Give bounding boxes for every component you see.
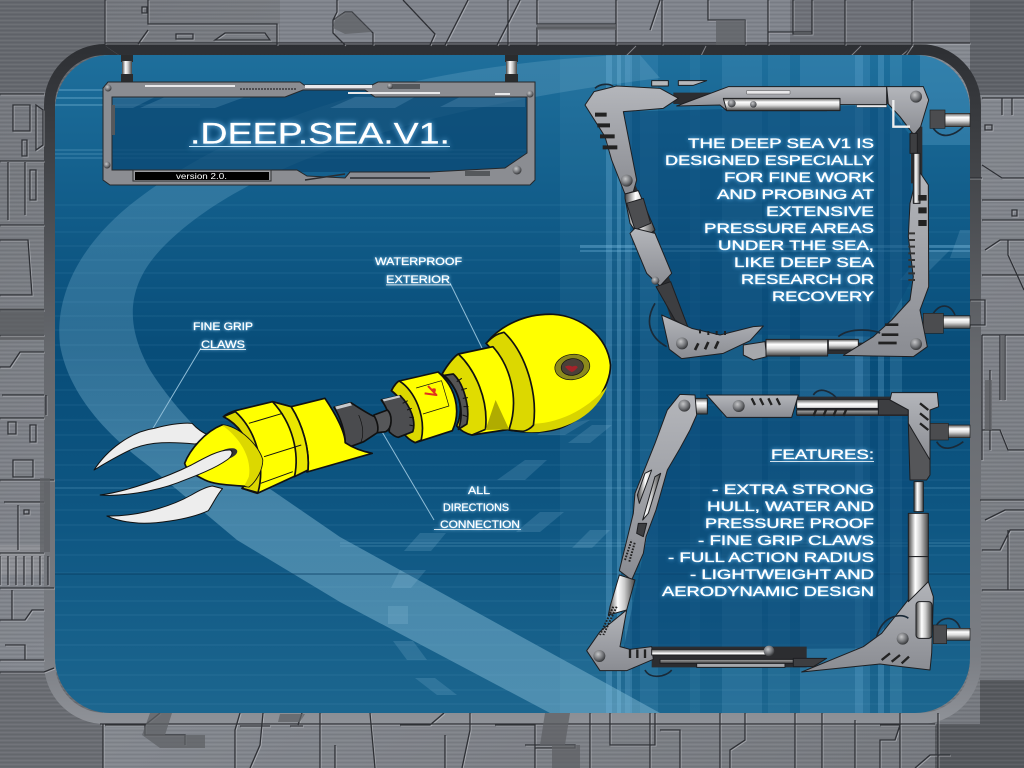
description text <box>665 136 874 304</box>
description text: UNDER THE SEA, <box>718 238 874 253</box>
head sphere <box>486 314 611 432</box>
hanging pipes <box>121 55 518 82</box>
collar <box>486 332 534 431</box>
claw top <box>94 423 209 470</box>
label: all directions connection: DIRECTIONS <box>443 502 509 514</box>
version slot <box>133 170 271 181</box>
description text: RECOVERY <box>772 289 874 304</box>
frame pieces <box>585 81 929 360</box>
description text: PRESSURE AREAS <box>704 221 874 236</box>
dark gear joint <box>381 396 414 437</box>
features text: - EXTRA STRONG <box>712 482 874 497</box>
frame pieces <box>587 393 939 672</box>
swoosh band <box>59 55 660 713</box>
description text: FOR FINE WORK <box>724 170 874 185</box>
description text: AND PROBING AT <box>717 187 874 202</box>
gear ring <box>444 374 468 429</box>
horizontal light streaks <box>55 90 970 704</box>
label: waterproof exterior: EXTERIOR <box>386 274 450 286</box>
features text: FEATURES: <box>771 447 874 462</box>
features text: - FINE GRIP CLAWS <box>698 533 874 548</box>
frame shell <box>103 82 535 185</box>
features text: - FULL ACTION RADIUS <box>668 550 874 565</box>
description text: LIKE DEEP SEA <box>734 255 874 270</box>
description text: RESEARCH OR <box>741 272 874 287</box>
bolts and details <box>593 390 963 676</box>
label: all directions connection: CONNECTION <box>440 519 520 531</box>
features text: - LIGHTWEIGHT AND <box>690 567 874 582</box>
connectors <box>930 423 970 644</box>
features text: HULL, WATER AND <box>707 499 874 514</box>
label: all directions connection: ALL <box>468 485 490 497</box>
description text: DESIGNED ESPECIALLY <box>665 153 874 168</box>
panel: ocean background <box>55 55 970 713</box>
label: fine grip claws: CLAWS <box>201 339 245 351</box>
label: fine grip claws: FINE GRIP <box>193 321 253 333</box>
dark underlay linking pieces <box>652 397 910 667</box>
description text: THE DEEP SEA V1 IS <box>688 136 874 151</box>
nose <box>185 425 262 487</box>
panel: title frame <box>103 82 535 185</box>
title: .DEEP.SEA.V1. <box>190 118 450 150</box>
panel: description frame <box>585 81 970 360</box>
label: waterproof exterior <box>375 256 462 286</box>
segment 2 <box>442 347 513 435</box>
label: fine grip claws <box>193 321 253 351</box>
claw bottom <box>107 486 222 523</box>
leader lines <box>152 283 482 520</box>
vertical light stripes <box>560 55 970 713</box>
description text: EXTENSIVE <box>766 204 874 219</box>
version slot: version 2.0. <box>176 171 227 181</box>
panel: features frame <box>587 390 970 676</box>
features text: AERODYNAMIC DESIGN <box>662 584 874 599</box>
features text <box>662 447 874 599</box>
tail body <box>291 398 372 472</box>
faint parallelograms <box>388 230 970 695</box>
label: waterproof exterior: WATERPROOF <box>375 256 462 268</box>
illustration: yellow probe <box>94 314 611 523</box>
ball joint <box>374 410 391 433</box>
dark underlay linking pieces <box>630 98 917 348</box>
dark cone <box>334 403 378 447</box>
segment 3 <box>391 372 457 443</box>
panel border ring <box>50 50 976 719</box>
features text: PRESSURE PROOF <box>705 516 874 531</box>
segment 1 <box>224 402 308 493</box>
connectors <box>923 110 970 333</box>
bolts and details <box>595 84 963 350</box>
claw middle <box>215 446 239 462</box>
label: all directions connection <box>434 485 521 531</box>
